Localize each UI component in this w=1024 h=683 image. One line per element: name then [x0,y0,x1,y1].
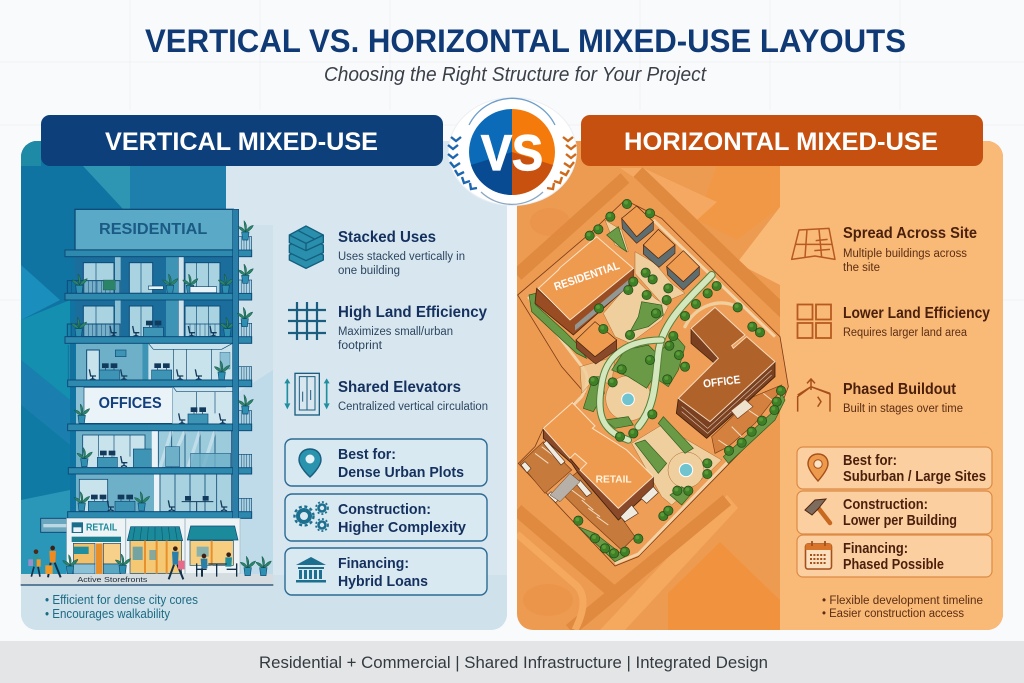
residential sign [75,209,233,250]
small houses [576,206,699,364]
feature: high land efficiency: High Land Efficiency [338,304,487,321]
header: vertical mixed-use: VERTICAL MIXED-USE [105,128,378,156]
right panel bullets [822,595,983,620]
residential sign: RESIDENTIAL [99,221,207,238]
feature: high land efficiency: Maximizes small/urban [338,326,453,338]
residential building [535,237,633,335]
card: best for suburban: Best for: [843,452,897,469]
sidewalk [21,574,273,585]
feature: phased buildout [798,379,963,415]
feature: lower land efficiency [798,304,990,339]
feature: high land efficiency [288,302,487,352]
vs badge: VS [481,125,543,181]
left panel bullets [45,593,198,621]
trees [574,199,786,558]
feature: phased buildout: Phased Buildout [843,381,957,398]
balconies [237,221,253,512]
card: construction lower per building: Construction: [843,496,928,513]
building illustration [21,209,273,585]
card: financing hybrid loans: Financing: [338,555,409,572]
floor slabs [65,250,252,518]
site lot [518,200,788,566]
feature: stacked uses [289,226,465,277]
icon: stacked boxes [289,226,323,268]
site plan illustration [518,199,788,566]
icon: four squares [798,304,831,338]
card: financing phased possible [797,535,992,577]
subtitle: Choosing the Right Structure for Your Project [324,64,707,86]
icon: gears [294,502,328,531]
card: construction lower per building: Lower per Building [843,512,957,529]
panel: vertical mixed-use [21,141,507,630]
tan walkways around lot [528,220,777,563]
feature: lower land efficiency: Lower Land Efficiency [843,305,990,322]
retail level: RETAIL [86,523,117,534]
card: best for suburban [797,447,992,489]
footer band: Residential + Commercial | Shared Infrastructure | Integrated Design [259,654,768,672]
icon: hammer [816,505,830,523]
office building: OFFICE [703,374,741,391]
storefront caption: Active Storefronts [77,575,148,584]
vs badge [448,98,576,206]
card: financing phased possible: Phased Possible [843,556,944,573]
card: construction higher complexity: Construction: [338,501,431,518]
icon: bank [296,557,326,582]
office building [676,307,775,438]
icon: site map [792,228,835,259]
icon: calendar [806,544,832,569]
office floors [68,343,233,512]
card: best for dense urban plots [285,439,487,486]
icon: grid [288,302,326,340]
retail building: RETAIL [596,474,632,485]
card: construction higher complexity [285,494,487,541]
retail level [63,518,240,574]
card: best for suburban: Suburban / Large Sites [843,468,986,485]
feature: stacked uses: Stacked Uses [338,229,436,246]
card: best for dense urban plots: Dense Urban Plots [338,464,464,481]
feature: spread across site: Spread Across Site [843,225,977,242]
left canopy [41,518,67,532]
green lawns [529,227,785,562]
feature: stacked uses: Uses stacked vertically in [338,251,465,263]
tan courtyards [580,220,722,505]
icon: phased frame [798,379,830,412]
feature: phased buildout: Built in stages over time [843,403,963,415]
footer band [0,641,1024,683]
panel: horizontal mixed-use [517,141,1003,630]
people [28,546,271,579]
card: financing hybrid loans: Hybrid Loans [338,573,428,590]
card: construction lower per building [797,491,992,534]
header: vertical mixed-use [41,115,443,166]
card: financing hybrid loans [285,548,487,595]
card: construction higher complexity: Higher Complexity [338,519,467,536]
walking paths [600,275,738,440]
icon: elevator [284,373,330,415]
office floors: OFFICES [99,395,162,412]
card: best for dense urban plots: Best for: [338,446,396,463]
icon: location pin [808,454,828,481]
left panel bullets: • Encourages walkability [45,607,171,621]
feature: shared elevators [284,373,488,415]
residential floors [67,257,235,337]
feature: high land efficiency: footprint [338,340,383,352]
header: horizontal mixed-use [581,115,983,166]
header: horizontal mixed-use: HORIZONTAL MIXED-USE [624,128,938,156]
right panel bullets: • Flexible development timeline [822,595,983,607]
feature: stacked uses: one building [338,265,400,277]
feature: spread across site: Multiple buildings across [843,248,967,260]
feature: spread across site [792,225,977,274]
title: VERTICAL VS. HORIZONTAL MIXED-USE LAYOUTS [145,23,906,59]
feature: shared elevators: Shared Elevators [338,379,461,396]
fountains [622,393,693,477]
parking lots [520,385,782,550]
left panel bullets: • Efficient for dense city cores [45,593,198,607]
feature: spread across site: the site [843,262,880,274]
card: financing phased possible: Financing: [843,540,908,557]
residential building: RESIDENTIAL [553,260,621,294]
icon: location pin [299,449,321,477]
feature: shared elevators: Centralized vertical circulation [338,401,488,413]
right panel bullets: • Easier construction access [822,608,964,620]
feature: lower land efficiency: Requires larger land area [843,327,968,339]
structural column [233,209,239,518]
retail building [521,403,658,522]
